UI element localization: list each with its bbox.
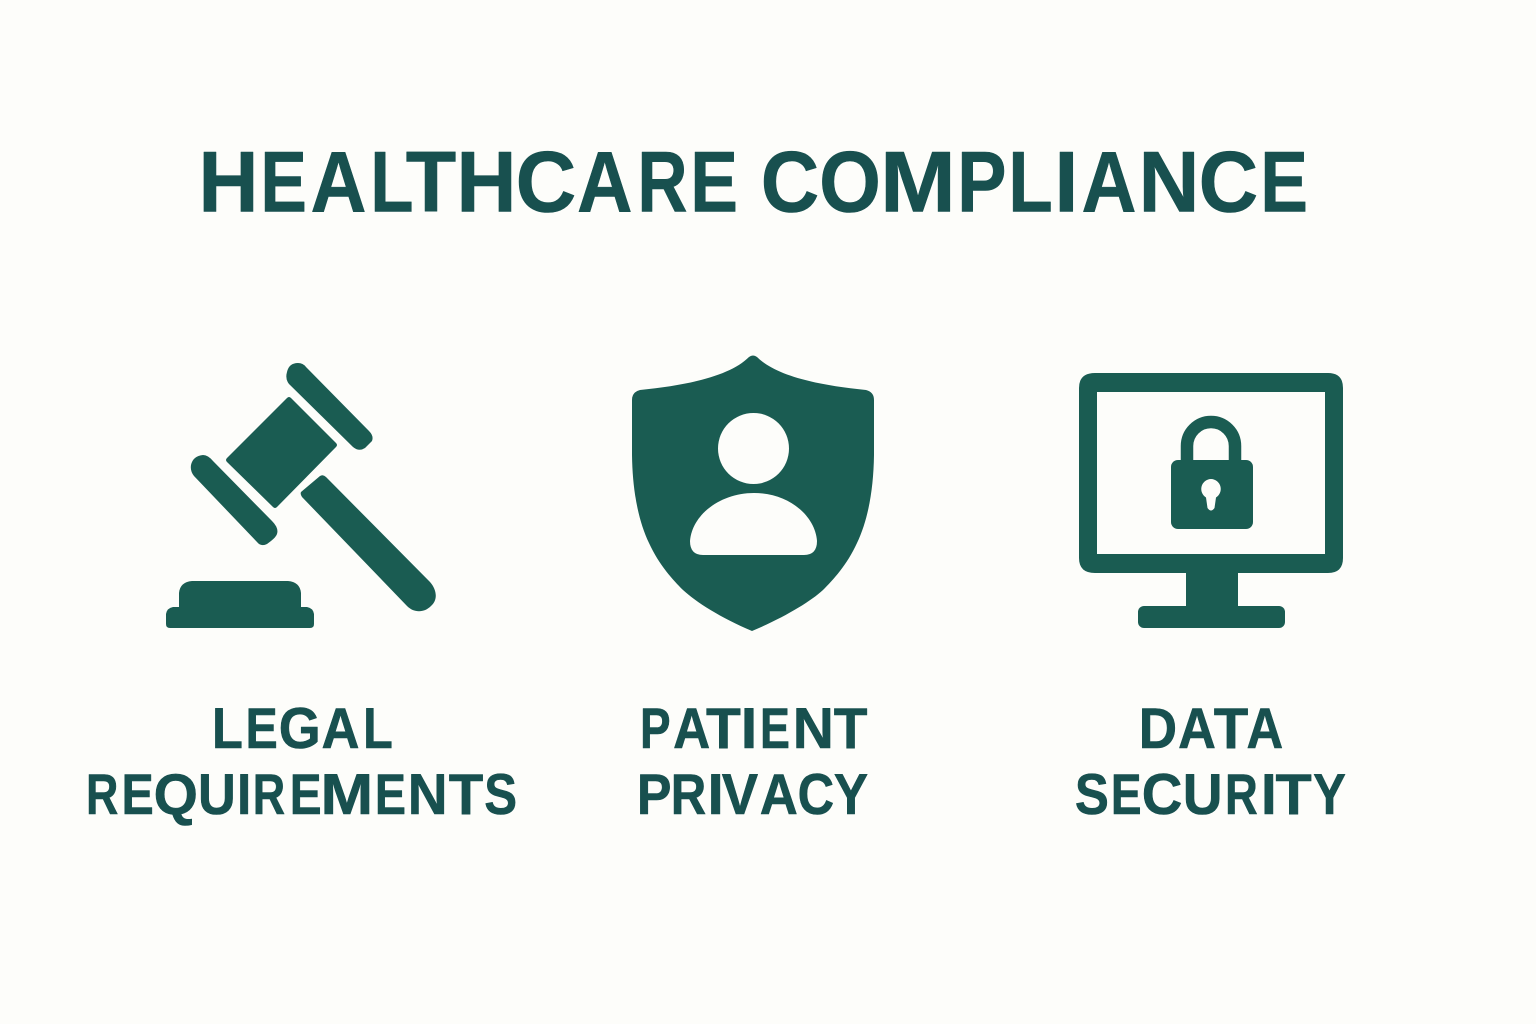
label: patient privacy [637,697,868,827]
label: legal requirements: N [408,763,448,827]
person head [718,413,789,484]
label: patient privacy: T [706,697,741,761]
label: patient privacy: E [760,697,790,761]
label: data security: D [1139,697,1177,761]
label: legal requirements: T [449,763,483,827]
title: T [406,135,456,231]
title: P [957,135,1006,231]
padlock shackle [1187,422,1235,462]
keyhole [1201,479,1221,510]
title: L [1008,135,1053,231]
title: A [577,135,632,231]
gavel bottom bar [191,455,277,545]
label: patient privacy: Y [834,763,868,827]
sound block [166,581,314,628]
title: O [819,135,881,231]
label: patient privacy: I [708,763,724,827]
label: legal requirements [86,697,517,827]
title: A [1082,135,1136,231]
label: legal requirements: E [375,763,406,827]
title: L [370,135,414,231]
label: data security: R [1225,763,1258,827]
title: H [456,135,517,231]
title: C [516,135,576,231]
label: legal requirements: A [322,697,360,761]
title: H [198,135,259,231]
label: data security: T [1214,697,1248,761]
title: C [761,135,819,231]
label: data security: E [1111,763,1142,827]
label: data security: A [1178,697,1216,761]
label: legal requirements: E [122,763,154,827]
label: patient privacy: R [671,763,706,827]
title: C [1199,135,1258,231]
label: legal requirements: L [363,697,393,761]
monitor stand [1186,572,1238,608]
label: patient privacy: A [760,763,798,827]
label: legal requirements: S [484,763,517,827]
label: patient privacy: P [637,763,672,827]
title: E [1260,135,1308,231]
monitor frame [1079,373,1343,573]
label: legal requirements: U [198,763,236,827]
label: data security: U [1183,763,1223,827]
title [198,135,1308,231]
gavel top bar [286,363,373,450]
label: legal requirements: G [279,697,321,761]
label: legal requirements: M [320,763,373,827]
shield [632,356,874,631]
icon: gavel [166,363,436,628]
label: data security: Y [1313,763,1346,827]
label: legal requirements: E [246,697,278,761]
label: legal requirements: I [237,763,251,827]
title: I [1054,135,1079,231]
label: data security: C [1142,763,1182,827]
icon: monitor with padlock [1079,373,1343,628]
gavel handle [301,475,436,611]
label: patient privacy: I [741,697,757,761]
title: N [1138,135,1200,231]
title: M [880,135,956,231]
label: legal requirements: R [86,763,118,827]
label: legal requirements: L [212,697,243,761]
label: patient privacy: C [798,763,834,827]
label: legal requirements: Q [154,763,198,827]
label: data security: A [1246,697,1283,761]
title: E [690,135,738,231]
icon: shield with person [632,356,874,631]
label: data security: S [1075,763,1109,827]
monitor base [1138,606,1285,628]
label: patient privacy: P [640,697,671,761]
label: data security [1075,697,1346,827]
label: data security: I [1261,763,1277,827]
padlock body [1171,460,1253,529]
label: patient privacy: N [793,697,834,761]
gavel head [226,397,337,508]
label: legal requirements: E [290,763,322,827]
person shoulders [690,493,817,555]
label: data security: T [1276,763,1312,827]
label: legal requirements: R [253,763,285,827]
title: E [260,135,307,231]
label: patient privacy: A [673,697,710,761]
label: patient privacy: V [722,763,758,827]
title: R [637,135,688,231]
title: A [310,135,366,231]
label: patient privacy: T [834,697,868,761]
